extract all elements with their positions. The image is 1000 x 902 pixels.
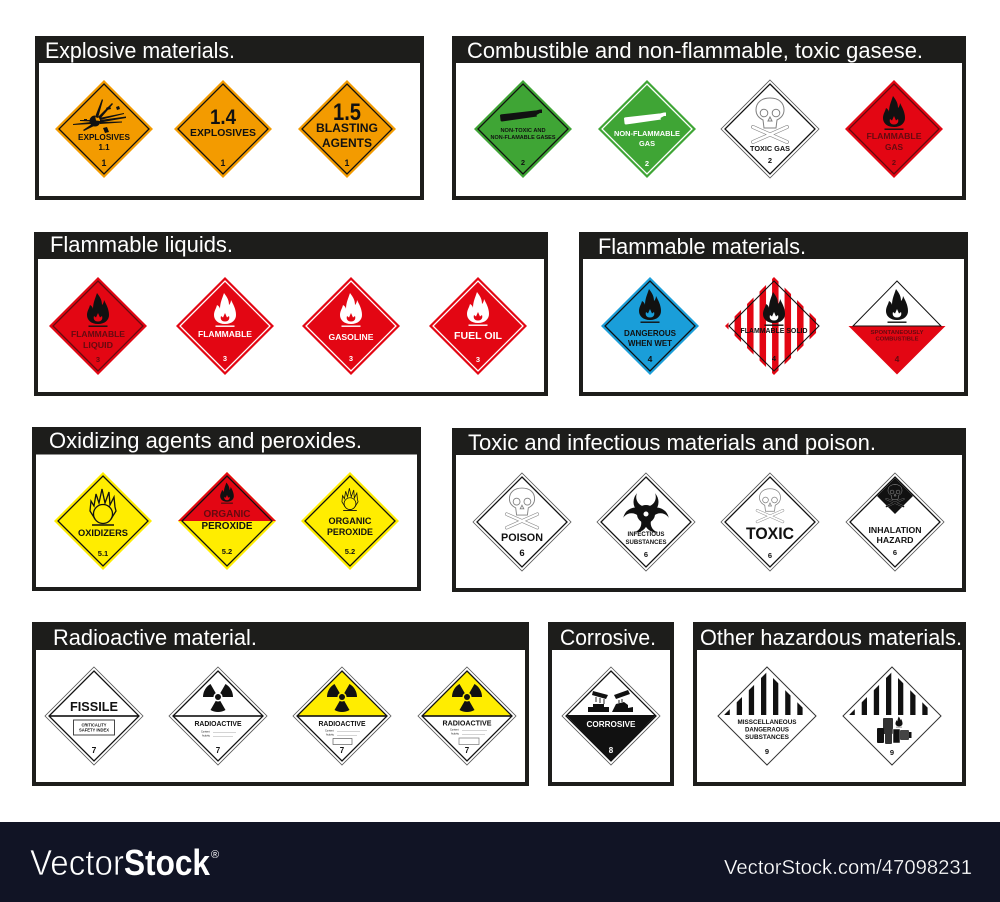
footer bar: [0, 822, 1000, 902]
sign: flammable gas: FLAMMABLE: [866, 131, 922, 141]
heading: flammable liquids: Flammable liquids.: [50, 232, 233, 257]
sign: infectious substances: 6: [644, 550, 648, 559]
sign: blasting agents 1.5: [298, 80, 396, 178]
sign: organic peroxide red: PEROXIDE: [202, 521, 253, 532]
sign: inhalation hazard: 6: [893, 548, 897, 557]
sign: explosives 1.4: [174, 80, 272, 178]
sign: non-toxic gas: NON-TOXIC AND: [500, 128, 546, 134]
sign: fissile: FISSILE: [70, 700, 118, 714]
sign: class 9 with batteries: [843, 667, 941, 765]
sign: explosives 1.4: 1: [221, 158, 226, 168]
sign: organic peroxide red: [178, 472, 276, 570]
sign: radioactive yellow III: [418, 667, 516, 765]
sign: fuel oil: [429, 277, 527, 375]
sign: flammable solid: FLAMMABLE SOLID: [740, 328, 808, 335]
sign: flammable liquid: 3: [96, 355, 100, 364]
sign: blasting agents 1.5: AGENTS: [322, 136, 372, 150]
heading: toxic and infectious: Toxic and infectious materials and poison.: [468, 430, 876, 455]
sign: flammable solid: [722, 277, 823, 375]
sign: toxic: [721, 473, 819, 571]
sign: flammable liquid: [49, 277, 147, 375]
panel: radioactive material: [32, 622, 529, 786]
sign: infectious substances: SUBSTANCES: [626, 540, 666, 546]
sign: non-flammable gas: GAS: [639, 139, 655, 148]
sign: radioactive yellow II: RADIOACTIVE: [318, 719, 366, 728]
sign: organic peroxide yellow: 5.2: [345, 547, 355, 556]
heading: radioactive material: Radioactive material.: [53, 625, 257, 650]
sign: radioactive yellow II: 7: [340, 746, 345, 755]
sign: radioactive yellow II: Activity: [326, 734, 335, 736]
sign: toxic gas: 2: [768, 156, 772, 165]
sign: spontaneously combustible: [848, 281, 946, 374]
sign: miscellaneous dangerous substances: [718, 667, 816, 765]
sign: organic peroxide red: ORGANIC: [203, 509, 251, 520]
sign: flammable: FLAMMABLE: [198, 329, 252, 339]
panel: toxic and infectious: [452, 428, 966, 592]
sign: explosives 1.4: EXPLOSIVES: [190, 127, 256, 139]
sign: radioactive white: 7: [216, 746, 221, 755]
sign: class 9 with batteries: 9: [890, 748, 894, 757]
sign: spontaneously combustible: 4: [895, 354, 900, 364]
sign: oxidizers: OXIDIZERS: [78, 528, 128, 538]
sign: non-toxic gas: 2: [521, 158, 525, 167]
sign: inhalation hazard: [846, 473, 944, 571]
sign: dangerous when wet: DANGEROUS: [624, 329, 677, 338]
sign: radioactive yellow II: Content: [325, 730, 334, 732]
sign: poison: POISON: [501, 532, 543, 544]
sign: blasting agents 1.5: BLASTING: [316, 121, 378, 135]
sign: organic peroxide yellow: PEROXIDE: [327, 527, 373, 537]
sign: explosives 1.1: EXPLOSIVES: [78, 133, 131, 142]
sign: blasting agents 1.5: 1.5: [333, 99, 361, 126]
heading: gases: Combustible and non-flammable, toxic gasese.: [467, 38, 923, 63]
sign: miscellaneous dangerous substances: DANGERAOUS: [745, 726, 790, 734]
sign: explosives 1.1: [55, 80, 153, 178]
sign: fissile: SAFETY INDEX: [79, 728, 109, 732]
panel: flammable materials: [579, 232, 968, 396]
sign: miscellaneous dangerous substances: MISSCELLANEOUS: [738, 719, 797, 726]
heading: corrosive: Corrosive.: [560, 625, 656, 650]
sign: infectious substances: INFECTIOUS: [628, 532, 664, 538]
sign: non-toxic gas: NON-FLAMABLE GASES: [490, 135, 556, 141]
sign: miscellaneous dangerous substances: 9: [765, 747, 769, 756]
sign: radioactive yellow II: [293, 667, 391, 765]
sign: corrosive: CORROSIVE: [586, 720, 636, 729]
sign: dangerous when wet: 4: [648, 354, 653, 364]
sign: non-flammable gas: NON-FLAMMABLE: [614, 129, 680, 138]
sign: infectious substances: [597, 473, 695, 571]
footer logo: Vector: [30, 842, 124, 883]
heading: flammable materials: Flammable materials.: [598, 234, 806, 259]
sign: oxidizers: 5.1: [98, 549, 108, 558]
panel: gases: [452, 36, 966, 200]
sign: flammable liquid: FLAMMABLE: [71, 329, 125, 339]
heading: oxidizing agents: Oxidizing agents and peroxides.: [49, 428, 362, 453]
sign: toxic: 6: [768, 551, 772, 560]
sign: flammable solid: 4: [772, 354, 777, 363]
sign: fissile: [45, 667, 143, 765]
sign: radioactive white: [169, 667, 267, 765]
sign: corrosive: [562, 667, 660, 765]
footer logo: ®: [211, 849, 219, 861]
panel: explosive materials: [35, 36, 424, 200]
sign: flammable gas: GAS: [885, 142, 903, 152]
panel: flammable liquids: [34, 232, 548, 396]
sign: dangerous when wet: WHEN WET: [628, 339, 672, 348]
sign: radioactive white: Content: [201, 730, 210, 734]
sign: poison: 6: [519, 548, 525, 559]
sign: explosives 1.1: 1.1: [98, 143, 110, 152]
sign: organic peroxide red: 5.2: [222, 547, 232, 556]
sign: radioactive yellow III: Activity: [451, 732, 460, 736]
sign: oxidizers: [54, 472, 152, 570]
sign: inhalation hazard: INHALATION: [868, 526, 922, 535]
sign: corrosive: 8: [609, 746, 614, 755]
sign: organic peroxide yellow: [301, 472, 399, 570]
sign: explosives 1.1: 1: [102, 158, 107, 168]
panel: oxidizing agents: [32, 427, 421, 591]
footer logo: Stock: [124, 842, 211, 883]
panel: other hazardous materials: [693, 622, 966, 786]
panel: corrosive: [548, 622, 674, 786]
sign: toxic gas: TOXIC GAS: [750, 144, 790, 153]
sign: radioactive white: RADIOACTIVE: [194, 719, 242, 728]
sign: toxic gas: [721, 80, 819, 178]
sign: flammable gas: 2: [892, 158, 896, 167]
sign: non-toxic gas: [474, 80, 572, 178]
sign: miscellaneous dangerous substances: SUBSTANCES: [745, 734, 790, 741]
sign: fuel oil: 3: [476, 355, 480, 364]
sign: inhalation hazard: HAZARD: [876, 536, 914, 545]
sign: flammable: 3: [223, 354, 227, 363]
sign: radioactive yellow III: RADIOACTIVE: [442, 718, 492, 728]
sign: flammable liquid: LIQUID: [83, 340, 113, 350]
sign: explosives 1.4: 1.4: [210, 106, 236, 129]
sign: gasoline: [302, 277, 400, 375]
sign: flammable: [176, 277, 274, 375]
heading: explosive materials: Explosive materials.: [45, 38, 235, 63]
sign: gasoline: 3: [349, 354, 353, 363]
sign: non-flammable gas: [598, 80, 696, 178]
footer image id: VectorStock.com/47098231: [724, 857, 972, 879]
sign: radioactive yellow III: 7: [465, 746, 470, 755]
sign: toxic: TOXIC: [746, 525, 794, 543]
sign: poison: [473, 473, 571, 571]
sign: gasoline: GASOLINE: [328, 332, 374, 342]
sign: spontaneously combustible: COMBUSTIBLE: [876, 336, 919, 342]
sign: non-flammable gas: 2: [645, 159, 649, 168]
sign: organic peroxide yellow: ORGANIC: [328, 516, 372, 526]
sign: spontaneously combustible: SPONTANEOUSLY: [870, 330, 924, 336]
sign: flammable gas: [845, 80, 943, 178]
sign: blasting agents 1.5: 1: [345, 158, 350, 168]
sign: dangerous when wet: [601, 277, 699, 375]
sign: fissile: 7: [92, 745, 97, 755]
footer logo: [30, 842, 219, 883]
sign: fuel oil: FUEL OIL: [454, 331, 502, 342]
sign: radioactive white: Activity: [202, 734, 211, 738]
sign: fissile: CRITICALITY: [82, 722, 107, 728]
heading: other hazardous materials: Other hazardous materials.: [700, 625, 962, 650]
sign: radioactive yellow III: Content: [450, 728, 459, 732]
